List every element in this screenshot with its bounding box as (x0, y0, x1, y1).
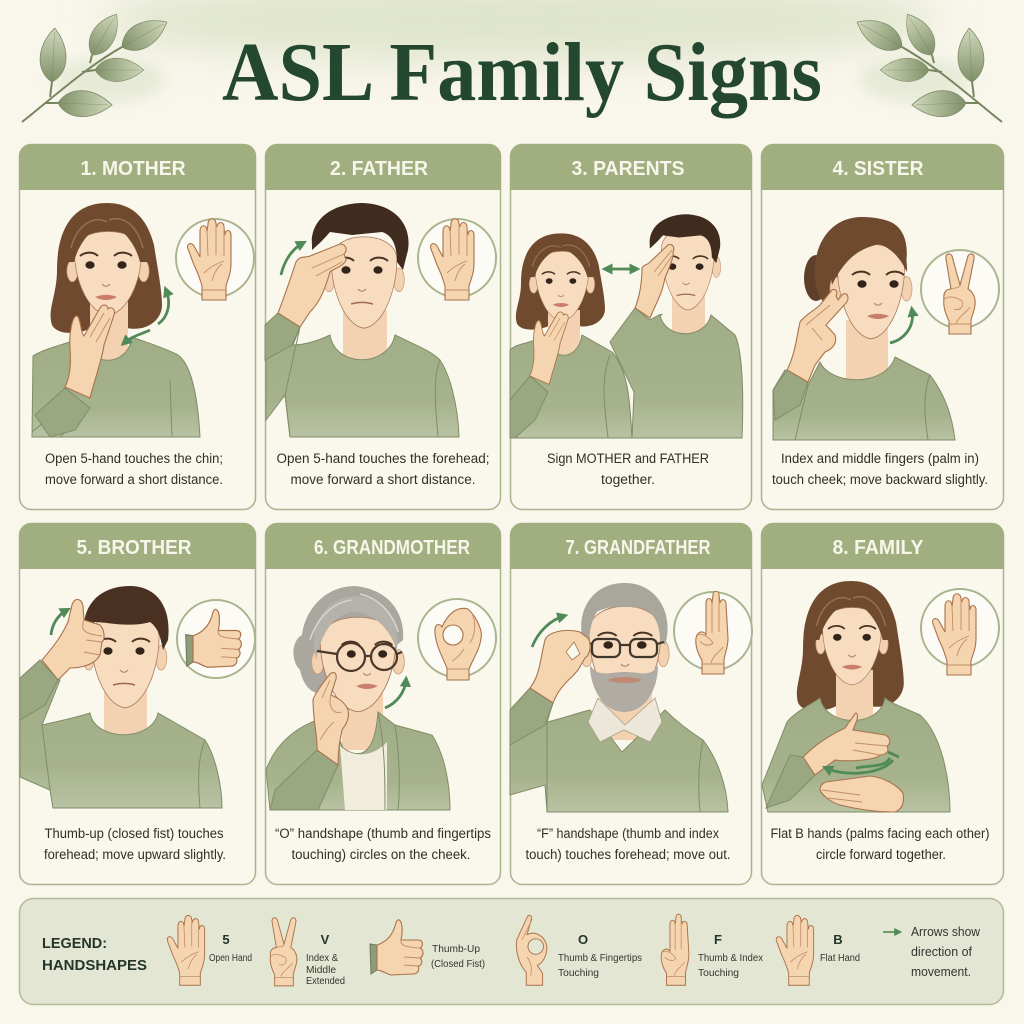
legend heading: HANDSHAPES (42, 957, 147, 974)
legend: O handshape: Thumb & Fingertips (558, 953, 642, 964)
panel: 8 family (761, 523, 1004, 884)
heading: grandfather: 7. GRANDFATHER (566, 537, 711, 559)
legend: thumb up handshape (370, 920, 485, 975)
legend: O handshape: Touching (558, 968, 599, 979)
illustration: mother figure (510, 233, 632, 438)
arrow: movement (124, 290, 169, 343)
heading: parents: 3. PARENTS (572, 158, 684, 180)
panel: 4 sister (761, 144, 1004, 510)
illustration: father figure (610, 214, 743, 438)
heading: sister: 4. SISTER (832, 158, 924, 180)
legend: 5 handshape: 5 (222, 932, 230, 947)
illustration: mother signing (32, 203, 200, 437)
icon: V hand (921, 250, 999, 334)
panel: 2 father (265, 144, 501, 510)
icon: open 5 hand (176, 219, 254, 300)
legend: F handshape: Thumb & Index (698, 953, 763, 964)
heading: family: 8. FAMILY (832, 537, 924, 559)
legend: O handshape: O (578, 932, 588, 947)
legend: B handshape: B (833, 932, 843, 947)
legend: F handshape: F (714, 932, 722, 947)
icon: thumb up hand (177, 600, 255, 678)
legend: arrow note: Arrows show (911, 925, 981, 939)
legend: thumb up handshape: Thumb-Up (432, 944, 480, 955)
description: move forward a short distance. (45, 472, 223, 487)
icon: flat hand (921, 589, 999, 675)
icon: F hand (674, 591, 752, 674)
legend: 5 handshape (167, 915, 252, 985)
heading: mother: 1. MOTHER (80, 158, 186, 180)
legend: arrow note: movement. (911, 965, 971, 979)
arrow: movement (890, 310, 912, 343)
description: together. (601, 472, 655, 487)
illustration: brother signing (20, 586, 222, 808)
description: Open 5-hand touches the chin; (45, 451, 223, 466)
legend: B handshape (776, 915, 860, 985)
description: circle forward together. (816, 847, 946, 862)
legend: thumb up handshape: (Closed Fist) (431, 959, 485, 970)
legend: V handshape: Extended (306, 976, 345, 987)
description: Flat B hands (palms facing each other) (770, 826, 990, 841)
arrow: double headed (606, 268, 636, 270)
description: Index and middle fingers (palm in) (781, 451, 979, 466)
panel: 5 brother (19, 523, 256, 884)
description: touching) circles on the cheek. (292, 847, 470, 862)
legend: arrow note: direction of (911, 945, 973, 959)
description: move forward a short distance. (290, 472, 476, 487)
illustration: grandmother signing (266, 586, 450, 810)
panel: 6 grandmother (265, 523, 501, 884)
heading: grandmother: 6. GRANDMOTHER (314, 537, 470, 559)
legend: V handshape: Index & (306, 953, 338, 964)
legend: V handshape: Middle (306, 965, 336, 976)
icon: O hand (418, 599, 496, 680)
arrow: movement (385, 680, 406, 708)
heading: father: 2. FATHER (330, 158, 429, 180)
legend: F handshape (661, 914, 763, 985)
title: ASL Family Signs (222, 26, 822, 119)
legend: F handshape: Touching (698, 968, 739, 979)
legend: arrow note (883, 925, 981, 979)
icon: open 5 hand (418, 219, 496, 300)
icon: right leaf branch (851, 8, 1002, 122)
illustration: father signing (265, 203, 459, 437)
legend: O handshape (516, 915, 642, 985)
description: forehead; move upward slightly. (44, 847, 226, 862)
legend: V handshape (270, 918, 345, 987)
description: touch) touches forehead; move out. (526, 847, 730, 862)
description: “F” handshape (thumb and index (537, 826, 719, 841)
description: Open 5-hand touches the forehead; (276, 451, 490, 466)
arrow: movement (532, 616, 564, 647)
legend: 5 handshape: Open Hand (209, 953, 252, 964)
panel: 1 mother (19, 144, 256, 510)
illustration: grandfather signing (510, 583, 728, 812)
description: Sign MOTHER and FATHER (547, 451, 709, 466)
panel: 7 grandfather (510, 523, 752, 884)
legend: B handshape: Flat Hand (820, 953, 860, 964)
arrow: movement (51, 610, 67, 635)
legend heading: LEGEND: (42, 935, 107, 952)
arrow: circular movement (826, 752, 899, 773)
arrow: movement (281, 243, 303, 275)
panel: 3 parents (510, 144, 752, 510)
illustration: sister signing (773, 217, 955, 440)
illustration: family signing (762, 581, 950, 812)
description: Thumb-up (closed fist) touches (44, 826, 224, 841)
icon: left leaf branch (22, 8, 173, 122)
description: “O” handshape (thumb and fingertips (275, 826, 491, 841)
panel: legend (20, 898, 1004, 1004)
legend: V handshape: V (321, 932, 330, 947)
heading: brother: 5. BROTHER (76, 537, 192, 559)
description: touch cheek; move backward slightly. (772, 472, 988, 487)
